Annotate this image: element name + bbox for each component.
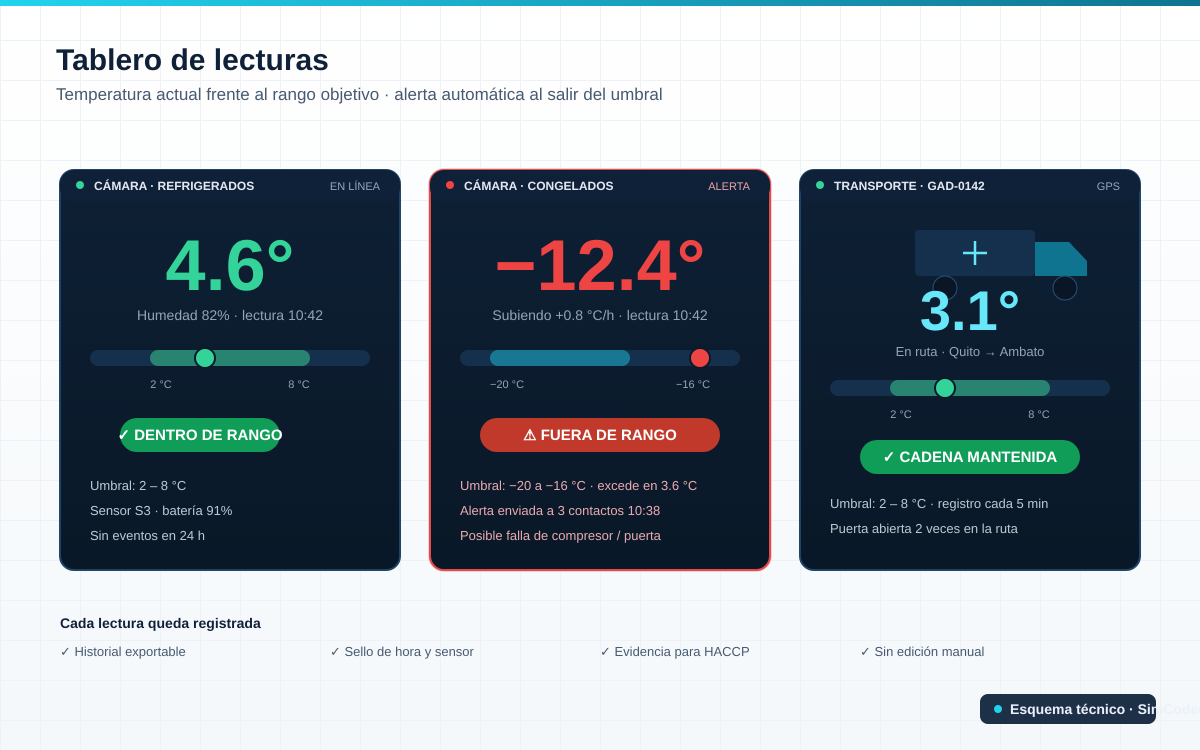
- status pill: ✓ DENTRO DE RANGO: [117, 427, 283, 444]
- details: [90, 478, 233, 543]
- panel: transporte: [800, 170, 1140, 570]
- footer checklist: ✓ Sin edición manual: [860, 644, 984, 659]
- card header: CÁMARA · CONGELADOS: [464, 179, 614, 193]
- card header: CÁMARA · REFRIGERADOS: [94, 179, 254, 193]
- reading note: En ruta · Quito → Ambato: [896, 344, 1044, 359]
- panel: cámara congelados: [429, 169, 771, 571]
- title: Tablero de lecturas: [56, 44, 329, 77]
- details: Sensor S3 · batería 91%: [90, 503, 233, 518]
- range gauge: −16 °C: [676, 379, 710, 391]
- status pill: ⚠ FUERA DE RANGO: [523, 427, 677, 444]
- range gauge: [830, 378, 1110, 421]
- temperature reading: 3.1°: [920, 279, 1020, 342]
- status pill: [860, 440, 1080, 474]
- details: Sin eventos en 24 h: [90, 528, 205, 543]
- card header: [800, 170, 1140, 202]
- footer heading: Cada lectura queda registrada: [60, 615, 261, 631]
- details: [460, 478, 697, 543]
- card header: GPS: [1097, 181, 1120, 193]
- footer checklist: ✓ Historial exportable: [60, 644, 186, 659]
- details: [830, 496, 1048, 536]
- badge: Esquema técnico · SimCoder: [1010, 701, 1200, 717]
- icon: refrigerated truck: [915, 230, 1087, 300]
- details: Umbral: 2 – 8 °C: [90, 478, 186, 493]
- status pill: ✓ CADENA MANTENIDA: [883, 449, 1057, 466]
- footer checklist: [60, 644, 984, 659]
- range gauge: [90, 348, 370, 391]
- status pill: [480, 418, 720, 452]
- details: Umbral: −20 a −16 °C · excede en 3.6 °C: [460, 478, 697, 493]
- details: Umbral: 2 – 8 °C · registro cada 5 min: [830, 496, 1048, 511]
- card header: ALERTA: [708, 181, 751, 193]
- reading note: Humedad 82% · lectura 10:42: [137, 307, 323, 323]
- range gauge: 2 °C: [890, 409, 912, 421]
- card header: [430, 170, 770, 202]
- details: Posible falla de compresor / puerta: [460, 528, 662, 543]
- reading note: Subiendo +0.8 °C/h · lectura 10:42: [492, 307, 708, 323]
- range gauge: 8 °C: [1028, 409, 1050, 421]
- range gauge: 8 °C: [288, 379, 310, 391]
- badge: [980, 694, 1200, 724]
- temperature reading: −12.4°: [495, 226, 705, 306]
- card header: [60, 170, 400, 202]
- temperature reading: 4.6°: [166, 226, 294, 306]
- details: Puerta abierta 2 veces en la ruta: [830, 521, 1019, 536]
- card header: EN LÍNEA: [330, 180, 381, 193]
- footer checklist: ✓ Evidencia para HACCP: [600, 644, 750, 659]
- range gauge: −20 °C: [490, 379, 524, 391]
- panel: cámara refrigerados: [60, 170, 400, 570]
- details: Alerta enviada a 3 contactos 10:38: [460, 503, 660, 518]
- status pill: [117, 418, 283, 452]
- range gauge: 2 °C: [150, 379, 172, 391]
- footer checklist: ✓ Sello de hora y sensor: [330, 644, 475, 659]
- range gauge: [460, 348, 740, 391]
- card header: TRANSPORTE · GAD-0142: [834, 179, 985, 193]
- subtitle: Temperatura actual frente al rango objetivo · alerta automática al salir del umbral: [56, 85, 663, 104]
- top accent bar: [0, 0, 1200, 6]
